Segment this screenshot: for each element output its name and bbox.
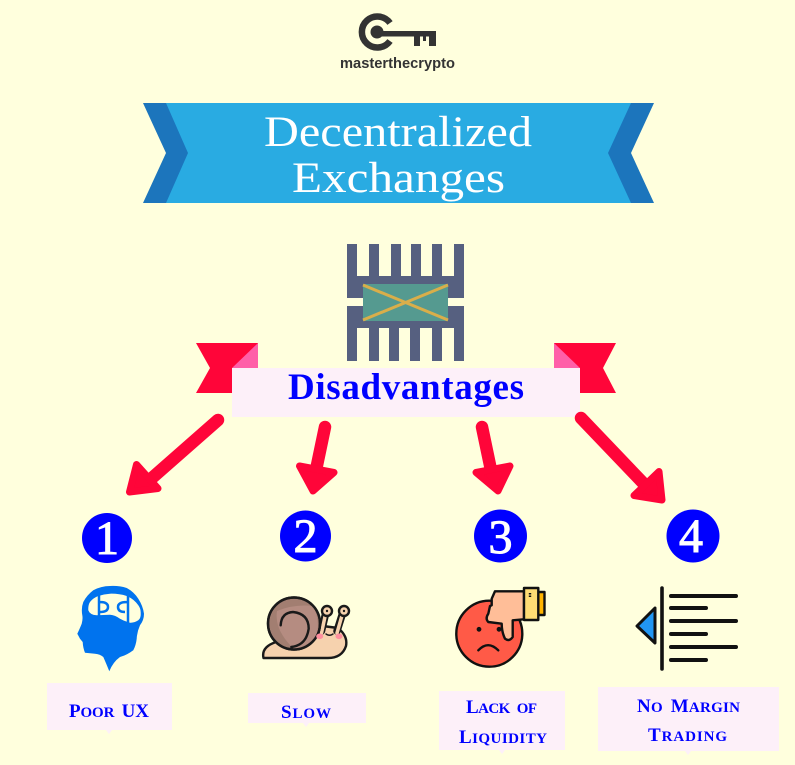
label: lack of liquidity: Liquidity [459, 723, 547, 748]
label: poor ux [47, 683, 172, 734]
label: lack of liquidity [439, 691, 565, 754]
arrow 2 [300, 427, 334, 491]
icon: exchange chip [347, 244, 464, 361]
icon: collapse left lines [637, 588, 736, 669]
title banner [143, 103, 654, 203]
label: no margin trading: No Margin [637, 692, 740, 717]
logo wordmark: masterthecrypto [340, 56, 455, 72]
title text [264, 109, 532, 202]
icon: head with puzzle brain [77, 586, 144, 671]
number badge 2: 2 [294, 510, 318, 563]
title text: Decentralized [264, 109, 532, 156]
logo: masterthecrypto [340, 16, 455, 72]
icon: sad face with thumbs down [456, 588, 544, 667]
number badge 1: 1 [95, 512, 119, 565]
number badge 4 [666, 510, 720, 563]
label: no margin trading: Trading [648, 721, 727, 746]
arrow 4 [581, 418, 662, 500]
label: poor ux: Poor UX [69, 697, 149, 722]
arrow 3 [476, 427, 510, 491]
disadvantages ribbon [196, 343, 616, 417]
label: lack of liquidity: Lack of [466, 693, 537, 718]
arrow 1 [130, 420, 218, 492]
number badge 1 [82, 512, 132, 565]
number badge 3: 3 [488, 511, 512, 564]
number badge 3 [474, 510, 527, 564]
number badge 2 [280, 510, 331, 563]
label: slow: Slow [281, 698, 331, 723]
label: no margin trading [598, 687, 779, 755]
icon: snail [263, 598, 349, 658]
icon: key [362, 16, 436, 47]
heading: disadvantages: Disadvantages [288, 367, 524, 408]
title text: Exchanges [292, 155, 505, 202]
number badge 4: 4 [679, 510, 703, 563]
label: slow [248, 693, 366, 727]
